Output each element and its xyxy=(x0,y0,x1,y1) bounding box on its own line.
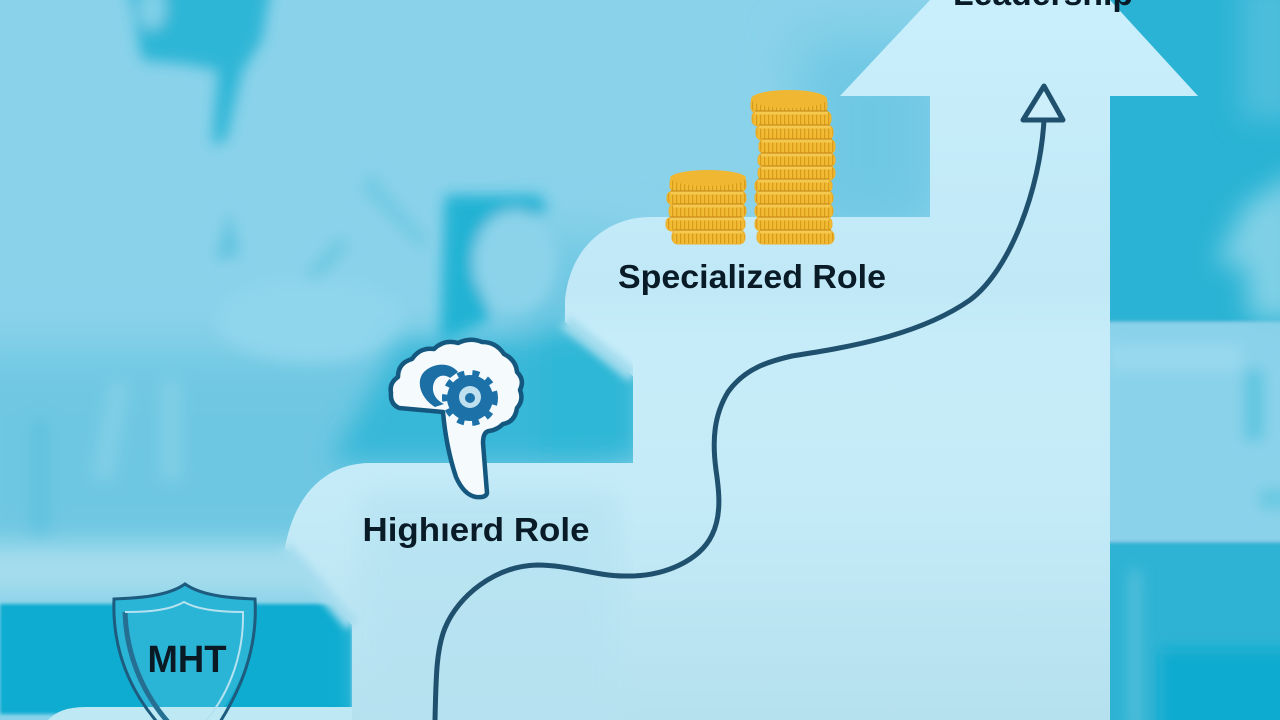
icon: brain with gears xyxy=(391,340,522,497)
step: bottom xyxy=(48,707,352,720)
big up arrow xyxy=(633,0,1198,720)
label: Highierd Role: Highıerd Role xyxy=(362,511,590,548)
icon: coin stacks xyxy=(666,90,835,244)
label: Specialized Role: Specialized Role xyxy=(618,258,886,295)
career path curve xyxy=(435,86,1063,720)
right side background xyxy=(1100,0,1280,720)
teal lower left band xyxy=(0,604,352,714)
staircase steps xyxy=(48,217,935,720)
shield text: MHT xyxy=(148,639,226,681)
right coin stack xyxy=(751,90,835,244)
step: top xyxy=(565,217,935,480)
arrowhead: triangle xyxy=(1023,86,1063,120)
step: middle xyxy=(285,463,650,720)
left coin stack xyxy=(666,170,746,244)
icon: MHT shield xyxy=(114,584,255,720)
